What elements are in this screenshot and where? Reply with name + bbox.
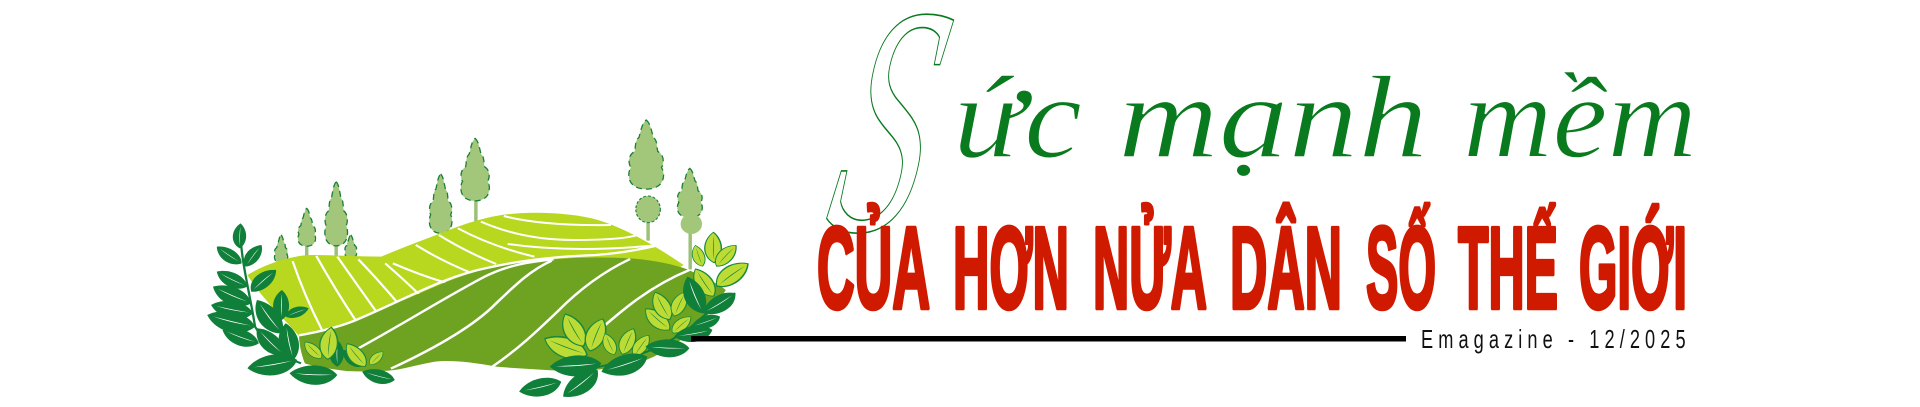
red heading: CỦA HƠN NỬA DÂN SỐ THẾ GIỚI: HƠN (953, 203, 1069, 333)
red heading: CỦA HƠN NỬA DÂN SỐ THẾ GIỚI: THẾ (1458, 203, 1558, 333)
illustration: green hills with trees and tea leaves (204, 120, 755, 404)
white furrows on dark hill (299, 246, 689, 369)
dark green front hill (299, 257, 726, 371)
red heading: CỦA HƠN NỬA DÂN SỐ THẾ GIỚI: SỐ (1366, 203, 1436, 333)
text: GIỚI (1579, 203, 1687, 333)
script heading: Sức mạnh mềm: mạnh (1118, 52, 1428, 183)
black rule line (691, 336, 1406, 342)
tea branch: right (517, 232, 755, 404)
tea branch: left (204, 223, 397, 387)
red heading: CỦA HƠN NỬA DÂN SỐ THẾ GIỚI: CỦA (817, 203, 930, 333)
dateline: Emagazine - 12/2025: Emagazine - 12/2025 (1421, 325, 1686, 354)
white furrows on light hill (293, 216, 655, 330)
red heading: CỦA HƠN NỬA DÂN SỐ THẾ GIỚI: NỬA (1093, 203, 1207, 333)
red heading: CỦA HƠN NỬA DÂN SỐ THẾ GIỚI: DÂN (1230, 202, 1342, 333)
script heading: Sức mạnh mềm: mềm (1463, 52, 1697, 183)
script heading: Sức mạnh mềm: ức (953, 52, 1082, 183)
script heading: Sức mạnh mềm (807, 0, 1697, 301)
trees on the hills (274, 120, 702, 269)
light green back hill (247, 213, 684, 340)
red heading: CỦA HƠN NỬA DÂN SỐ THẾ GIỚI (817, 202, 1687, 333)
